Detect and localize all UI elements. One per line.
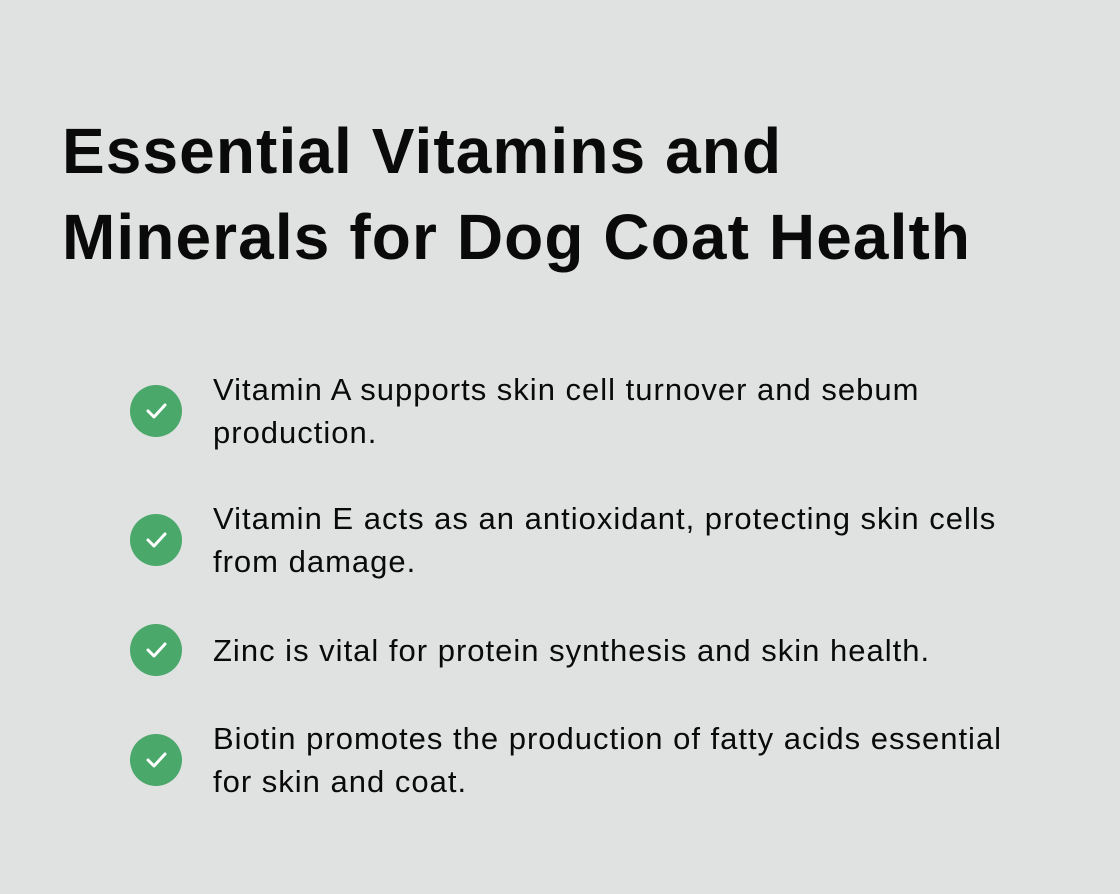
text: Vitamin E acts as an antioxidant, protecting skin cells [213, 501, 996, 536]
text [213, 721, 1002, 799]
text: production. [213, 415, 377, 450]
text: from damage. [213, 544, 416, 579]
text [213, 501, 996, 579]
title: Minerals for Dog Coat Health [62, 201, 971, 273]
text: Vitamin A supports skin cell turnover and sebum [213, 372, 919, 407]
icon: check [130, 385, 182, 437]
item: zinc [130, 624, 930, 676]
item: vitamin E [130, 501, 996, 579]
title [62, 115, 971, 273]
icon: check [130, 514, 182, 566]
icon: check [130, 624, 182, 676]
text: Zinc is vital for protein synthesis and skin health. [213, 633, 930, 668]
icon: check [130, 734, 182, 786]
text: Biotin promotes the production of fatty acids essential [213, 721, 1002, 756]
item: vitamin A [130, 372, 919, 450]
title: Essential Vitamins and [62, 115, 782, 187]
item: biotin [130, 721, 1002, 799]
text: for skin and coat. [213, 764, 467, 799]
text [213, 372, 919, 450]
